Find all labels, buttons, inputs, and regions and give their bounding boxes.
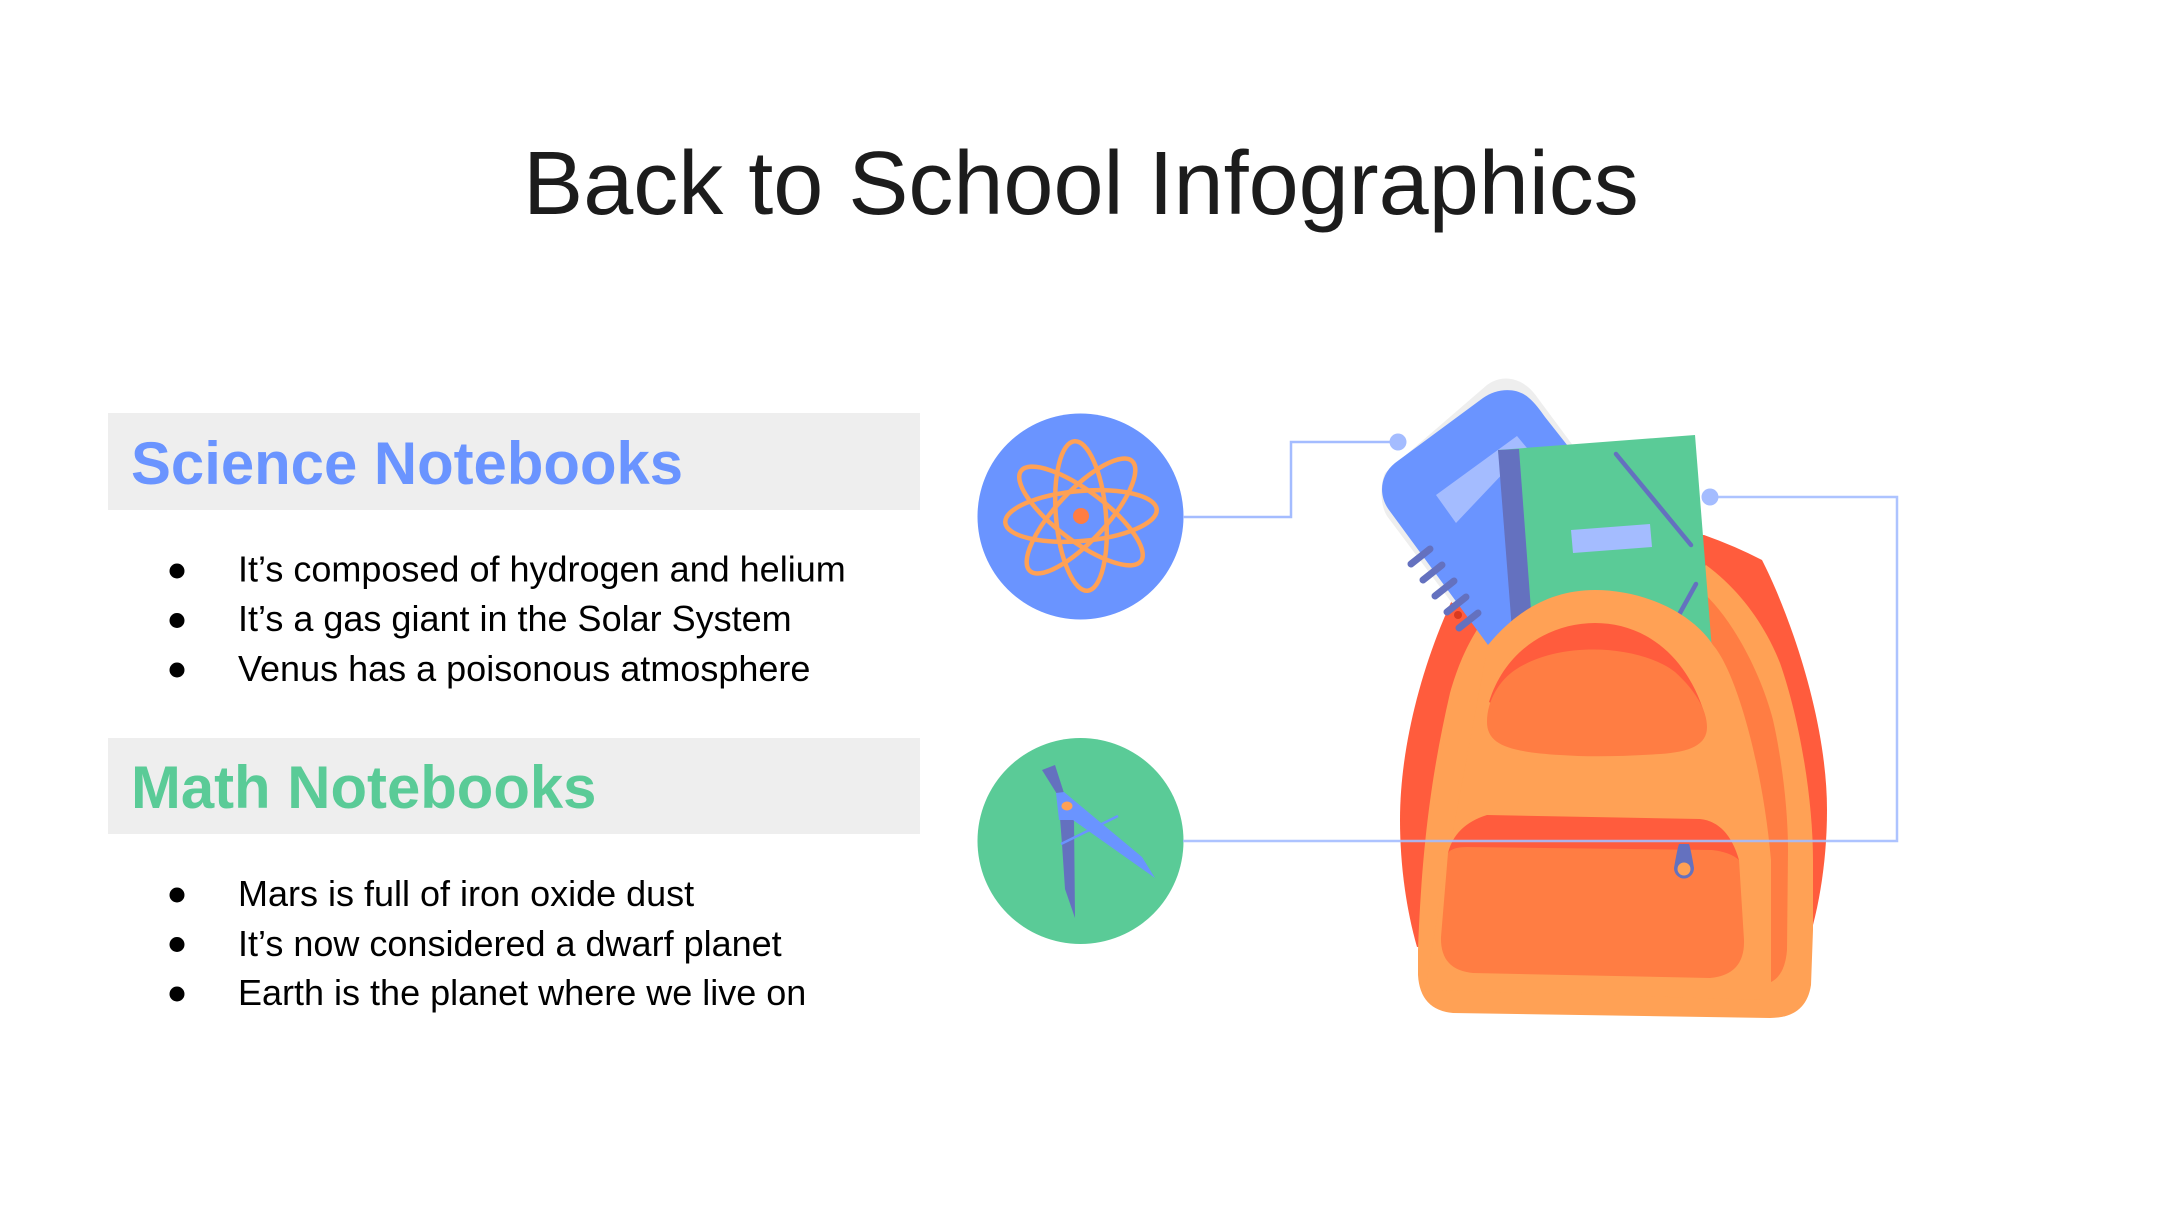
connector: compass to green folder	[1183, 488, 1897, 841]
heading: science notebooks: Science Notebooks	[131, 430, 683, 497]
connector: atom to blue notebook	[1183, 434, 1406, 517]
backpack outer body	[1418, 565, 1813, 1018]
text block: math bullets: It’s now considered a dwarf planet	[238, 923, 782, 964]
upper pocket	[1487, 623, 1707, 756]
text block: science bullets	[170, 548, 846, 689]
text block: science bullets: It’s composed of hydrogen and helium	[238, 548, 846, 590]
panel: math notebooks	[108, 738, 920, 1013]
text block: math bullets: Earth is the planet where we live on	[238, 972, 806, 1013]
backpack side band	[1700, 590, 1788, 982]
blue spiral notebook	[1381, 379, 1580, 645]
title: Back to School Infographics	[523, 134, 1639, 234]
icon: compass in green circle	[978, 738, 1184, 944]
zipper	[1674, 844, 1694, 879]
heading: science notebooks	[108, 413, 920, 510]
text block: math bullets: Mars is full of iron oxide dust	[238, 873, 694, 914]
text block: science bullets: Venus has a poisonous atmosphere	[238, 648, 810, 689]
heading: math notebooks	[108, 738, 920, 834]
lower pocket	[1441, 815, 1744, 978]
heading: math notebooks: Math Notebooks	[131, 754, 596, 821]
illustration: backpack with notebooks	[1381, 379, 1827, 1018]
backpack rear	[1400, 535, 1827, 947]
green folder	[1498, 435, 1712, 650]
text block: math bullets	[170, 873, 806, 1013]
panel: science notebooks	[108, 413, 920, 689]
icon: atom in blue circle	[978, 414, 1184, 620]
text block: science bullets: It’s a gas giant in the Solar System	[238, 598, 792, 639]
backpack front	[1425, 590, 1771, 1000]
